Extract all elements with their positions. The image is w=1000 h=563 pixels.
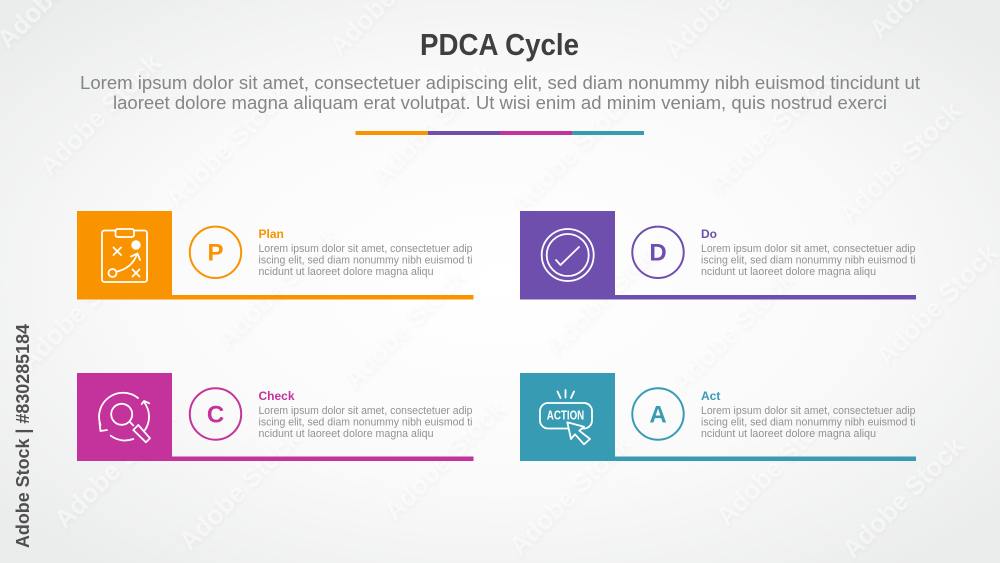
icon: clipboard strategy bbox=[102, 229, 147, 282]
description: check: ncidunt ut laoreet dolore magna aliqu bbox=[258, 428, 434, 440]
description: check: Lorem ipsum dolor sit amet, consectetuer adip bbox=[258, 405, 472, 417]
subtitle bbox=[80, 73, 920, 113]
watermark pattern: Adobe Stock bbox=[338, 260, 472, 394]
description: act bbox=[701, 405, 916, 440]
watermark pattern: Adobe Stock bbox=[160, 80, 294, 214]
stock id label: Adobe Stock | #830285184 bbox=[13, 324, 33, 548]
heading: Check: Check bbox=[258, 389, 295, 403]
description: act: Lorem ipsum dolor sit amet, consectetuer adip bbox=[701, 405, 916, 417]
watermark pattern: Adobe Stock bbox=[710, 397, 844, 531]
plan colour block and underline bbox=[77, 211, 474, 300]
watermark pattern: Adobe Stock bbox=[48, 400, 182, 534]
description: check bbox=[258, 405, 472, 440]
title: PDCA Cycle bbox=[420, 27, 579, 62]
heading: Do: Do bbox=[701, 227, 717, 241]
heading: Act: Act bbox=[701, 389, 720, 403]
description: plan: Lorem ipsum dolor sit amet, consectetuer adip bbox=[258, 243, 472, 255]
badge: D bbox=[632, 227, 684, 278]
badge: P: P bbox=[207, 240, 224, 266]
badge: D: D bbox=[649, 240, 667, 266]
watermark pattern: Adobe Stock bbox=[666, 263, 800, 397]
description: do: Lorem ipsum dolor sit amet, consectetuer adip bbox=[701, 243, 916, 255]
description: act: ncidunt ut laoreet dolore magna aliqu bbox=[701, 428, 876, 440]
icon: magnifier with cycle arrows bbox=[99, 393, 150, 442]
watermark pattern: Adobe Stock bbox=[33, 47, 167, 181]
icon: action button with cursor bbox=[540, 390, 592, 444]
watermark pattern: Adobe Stock bbox=[870, 237, 1000, 371]
watermark pattern: Adobe Stock bbox=[503, 427, 637, 561]
watermark pattern: Adobe Stock bbox=[173, 422, 307, 556]
description: plan: iscing elit, sed diam nonummy nibh euismod ti bbox=[258, 254, 472, 266]
act colour block and underline bbox=[520, 373, 916, 461]
panel: check bbox=[77, 373, 474, 461]
description: do bbox=[701, 243, 916, 278]
panel: do bbox=[520, 211, 916, 300]
badge: A: A bbox=[649, 402, 667, 428]
subtitle: laoreet dolore magna aliquam erat volutpat. Ut wisi enim ad minim veniam, quis nostrud exerci bbox=[113, 93, 887, 113]
watermark pattern: Adobe Stock bbox=[836, 430, 970, 563]
divider: four colour bar bbox=[356, 131, 644, 135]
badge: C bbox=[190, 388, 241, 440]
watermark pattern: Adobe Stock bbox=[378, 392, 512, 526]
subtitle: Lorem ipsum dolor sit amet, consectetuer adipiscing elit, sed diam nonummy nibh euismod tincidunt ut bbox=[80, 73, 920, 93]
description: do: ncidunt ut laoreet dolore magna aliqu bbox=[701, 266, 876, 278]
heading: Plan: Plan bbox=[258, 227, 284, 241]
watermark pattern: Adobe Stock bbox=[211, 220, 345, 354]
watermark pattern: Adobe Stock bbox=[366, 57, 500, 191]
badge: A bbox=[632, 388, 684, 440]
check colour block and underline bbox=[77, 373, 474, 461]
icon: action button with cursor: ACTION bbox=[547, 408, 584, 422]
watermark pattern: Adobe Stock bbox=[13, 242, 147, 376]
description: plan: ncidunt ut laoreet dolore magna aliqu bbox=[258, 266, 434, 278]
icon: check mark seal bbox=[542, 229, 594, 281]
panel: act bbox=[520, 373, 916, 461]
watermark pattern: Adobe Stock bbox=[505, 85, 639, 219]
watermark pattern: Adobe Stock bbox=[833, 95, 967, 229]
panel: plan bbox=[77, 211, 474, 300]
badge: C: C bbox=[207, 402, 224, 428]
description: check: iscing elit, sed diam nonummy nibh euismod ti bbox=[258, 416, 472, 428]
do colour block and underline bbox=[520, 211, 916, 300]
description: act: iscing elit, sed diam nonummy nibh euismod ti bbox=[701, 416, 916, 428]
watermark pattern: Adobe Stock bbox=[703, 65, 837, 199]
description: plan bbox=[258, 243, 472, 278]
watermark pattern: Adobe Stock bbox=[540, 227, 674, 361]
badge: P bbox=[190, 227, 241, 278]
description: do: iscing elit, sed diam nonummy nibh euismod ti bbox=[701, 254, 916, 266]
